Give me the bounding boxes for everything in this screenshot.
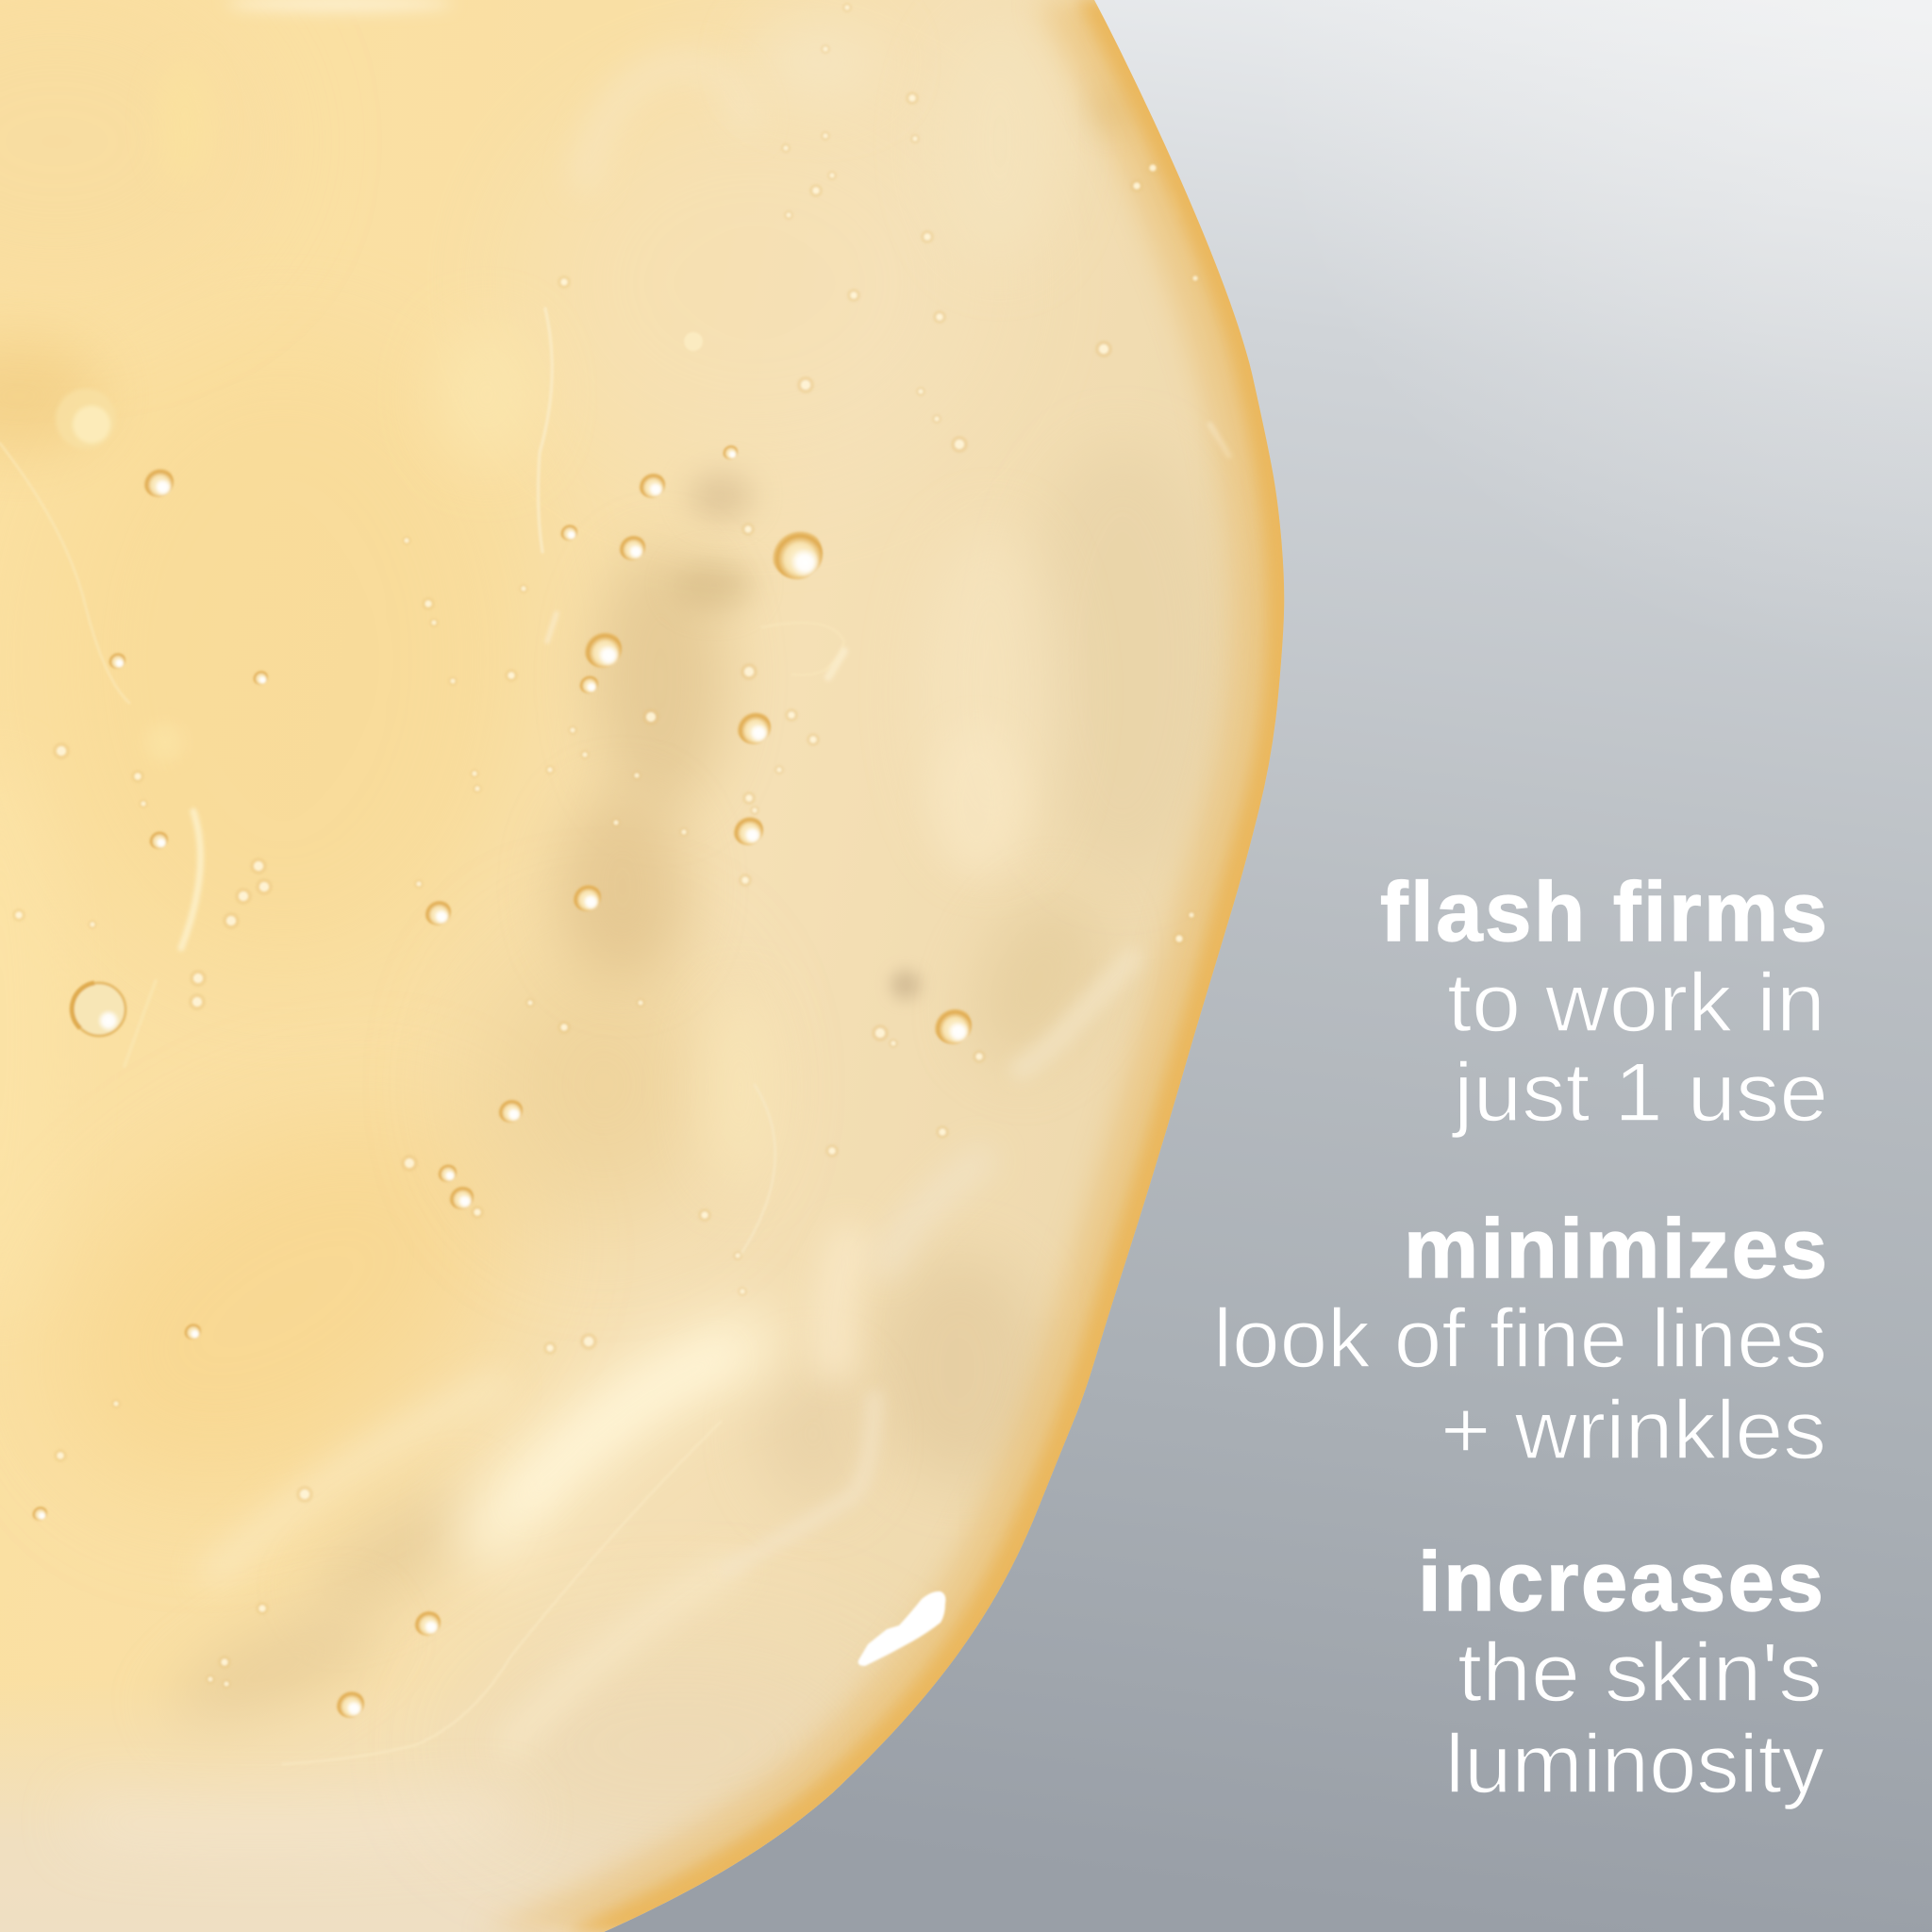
benefit: flash firms xyxy=(1380,864,1828,1139)
benefit: increases: luminosity xyxy=(1445,1717,1824,1810)
gel swirl highlights xyxy=(0,65,1229,1826)
golden gel swatch xyxy=(0,0,1415,1932)
benefit: minimizes: minimizes xyxy=(1404,1201,1827,1295)
benefit: increases xyxy=(1418,1534,1824,1810)
benefit: increases: increases xyxy=(1418,1534,1824,1628)
benefit: minimizes: look of fine lines xyxy=(1213,1291,1827,1385)
large soft bubble xyxy=(56,389,116,449)
large ringed bubble at lower left xyxy=(72,983,125,1036)
air bubbles xyxy=(32,444,972,1718)
benefit: flash firms: to work in xyxy=(1447,956,1825,1049)
benefit: flash firms: flash firms xyxy=(1380,864,1827,958)
tiny micro bubbles xyxy=(19,8,1195,1684)
benefit: flash firms: just 1 use xyxy=(1451,1045,1828,1139)
amber rim of the swatch xyxy=(481,0,1321,1932)
benefit: minimizes: + wrinkles xyxy=(1441,1383,1826,1476)
gel tone variation xyxy=(0,0,1226,1932)
benefits text xyxy=(1213,864,1828,1810)
benefit: minimizes xyxy=(1213,1201,1827,1476)
white glare highlight xyxy=(858,1591,945,1666)
benefit: increases: the skin's xyxy=(1457,1625,1823,1719)
